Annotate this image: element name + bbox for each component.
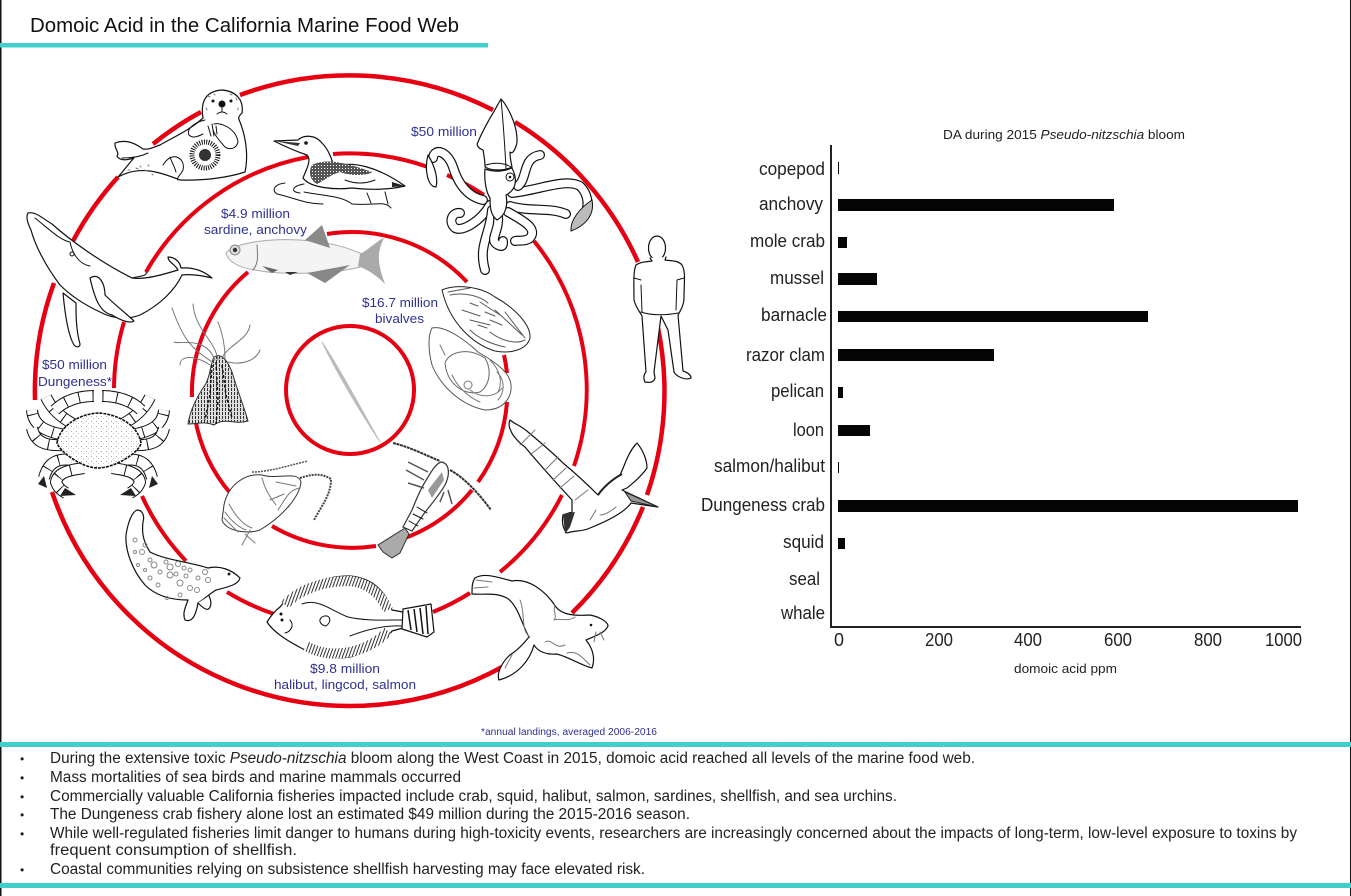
bullet list: Commercially valuable California fisheries impacted include crab, squid, halibut, salmon, sardines, shellfish, and sea urchins. (50, 788, 897, 805)
icon: pseudo-nitzschia diatom (322, 342, 380, 442)
species labels: whale (780, 603, 825, 623)
bullet list: The Dungeness crab fishery alone lost an estimated $49 million during the 2015-2016 season. (50, 806, 690, 823)
label: dungeness fishery: $50 million (42, 357, 107, 372)
icon: squid: $50 million (411, 124, 477, 139)
species labels: mole crab (750, 231, 825, 251)
species labels: pelican (771, 381, 824, 401)
bullet list: • (20, 752, 24, 766)
species labels: squid (783, 532, 824, 552)
axis title: domoic acid ppm (1014, 661, 1117, 676)
axis tick labels (834, 630, 1302, 650)
ring 2: low-level consumers (192, 232, 507, 548)
species labels (701, 159, 827, 623)
label: bivalve fishery: bivalves (375, 311, 425, 326)
divider bar bottom (0, 883, 1351, 888)
bullet list: • (20, 808, 24, 822)
divider bar top (0, 742, 1351, 747)
axis tick labels: 1000 (1265, 630, 1302, 650)
icon: sea lion (472, 575, 608, 680)
species labels: razor clam (746, 345, 825, 365)
icon: mussel (442, 287, 530, 352)
icon: flatfish (267, 576, 434, 658)
icon: common loon (274, 136, 405, 208)
icon: oyster (429, 328, 511, 410)
icon: squid (411, 99, 593, 270)
species labels: barnacle (761, 305, 827, 325)
fishery labels (38, 206, 657, 738)
icon: barnacle (172, 304, 260, 425)
bullet list: During the extensive toxic Pseudo-nitzschia bloom along the West Coast in 2015, domoic acid reached all levels of the marine food web. (50, 750, 975, 767)
title underline (0, 43, 488, 48)
species labels: seal (789, 569, 820, 589)
bullet list: • (20, 790, 24, 804)
icon: harbor seal (126, 510, 240, 621)
axes (830, 145, 1301, 627)
species labels: mussel (770, 268, 824, 288)
bullet list: Mass mortalities of sea birds and marine mammals occurred (50, 769, 461, 786)
ring 3: mid-level consumers (114, 153, 587, 614)
species labels: anchovy (759, 194, 823, 214)
label: sardine and anchovy fishery: $4.9 million (221, 206, 290, 221)
footnote: *annual landings, averaged 2006-2016 (481, 727, 657, 738)
axis tick labels: 200 (925, 630, 953, 650)
bullet list (20, 750, 1297, 878)
bullet list: frequent consumption of shellfish. (50, 842, 297, 859)
label: dungeness fishery: Dungeness* (38, 374, 112, 389)
bars (838, 162, 1298, 549)
chart: domoic acid by species (701, 127, 1302, 676)
title: Domoic Acid in the California Marine Food Web (30, 15, 459, 37)
icon: copepod (378, 443, 491, 558)
species labels: loon (793, 420, 824, 440)
chart title: DA during 2015 Pseudo-nitzschia bloom (943, 127, 1185, 142)
label: groundfish fishery: halibut, lingcod, salmon (274, 677, 416, 692)
icon: humpback whale (27, 213, 212, 347)
species labels: salmon/halibut (714, 456, 825, 476)
bullet list: Coastal communities relying on subsistence shellfish harvesting may face elevated risk. (50, 861, 645, 878)
icon: human (634, 236, 691, 382)
icon: mole crab (222, 461, 331, 545)
icon: dungeness crab (32, 396, 164, 496)
bullet list: • (20, 863, 24, 877)
species labels: copepod (759, 159, 825, 179)
label: bivalve fishery: $16.7 million (362, 295, 438, 310)
species labels: Dungeness crab (701, 495, 825, 515)
bullet list: While well-regulated fisheries limit danger to humans during high-toxicity events, researchers are increasingly concerned about the impacts of long-term, low-level exposure to toxins by (50, 825, 1297, 842)
ring 1: phytoplankton (286, 326, 414, 454)
bullet list: • (20, 771, 24, 785)
label: groundfish fishery: $9.8 million (310, 661, 380, 676)
icon: anchovy (226, 225, 385, 284)
food web rings (35, 75, 664, 706)
ring 4: top predators (35, 75, 664, 706)
axis tick labels: 0 (834, 630, 844, 650)
label: sardine and anchovy fishery: sardine, anchovy (204, 222, 308, 237)
bullet list: • (20, 827, 24, 841)
icon: brown pelican (509, 420, 658, 534)
axis tick labels: 600 (1104, 630, 1132, 650)
axis tick labels: 400 (1014, 630, 1042, 650)
axis tick labels: 800 (1194, 630, 1222, 650)
icon: sea otter (115, 90, 247, 180)
